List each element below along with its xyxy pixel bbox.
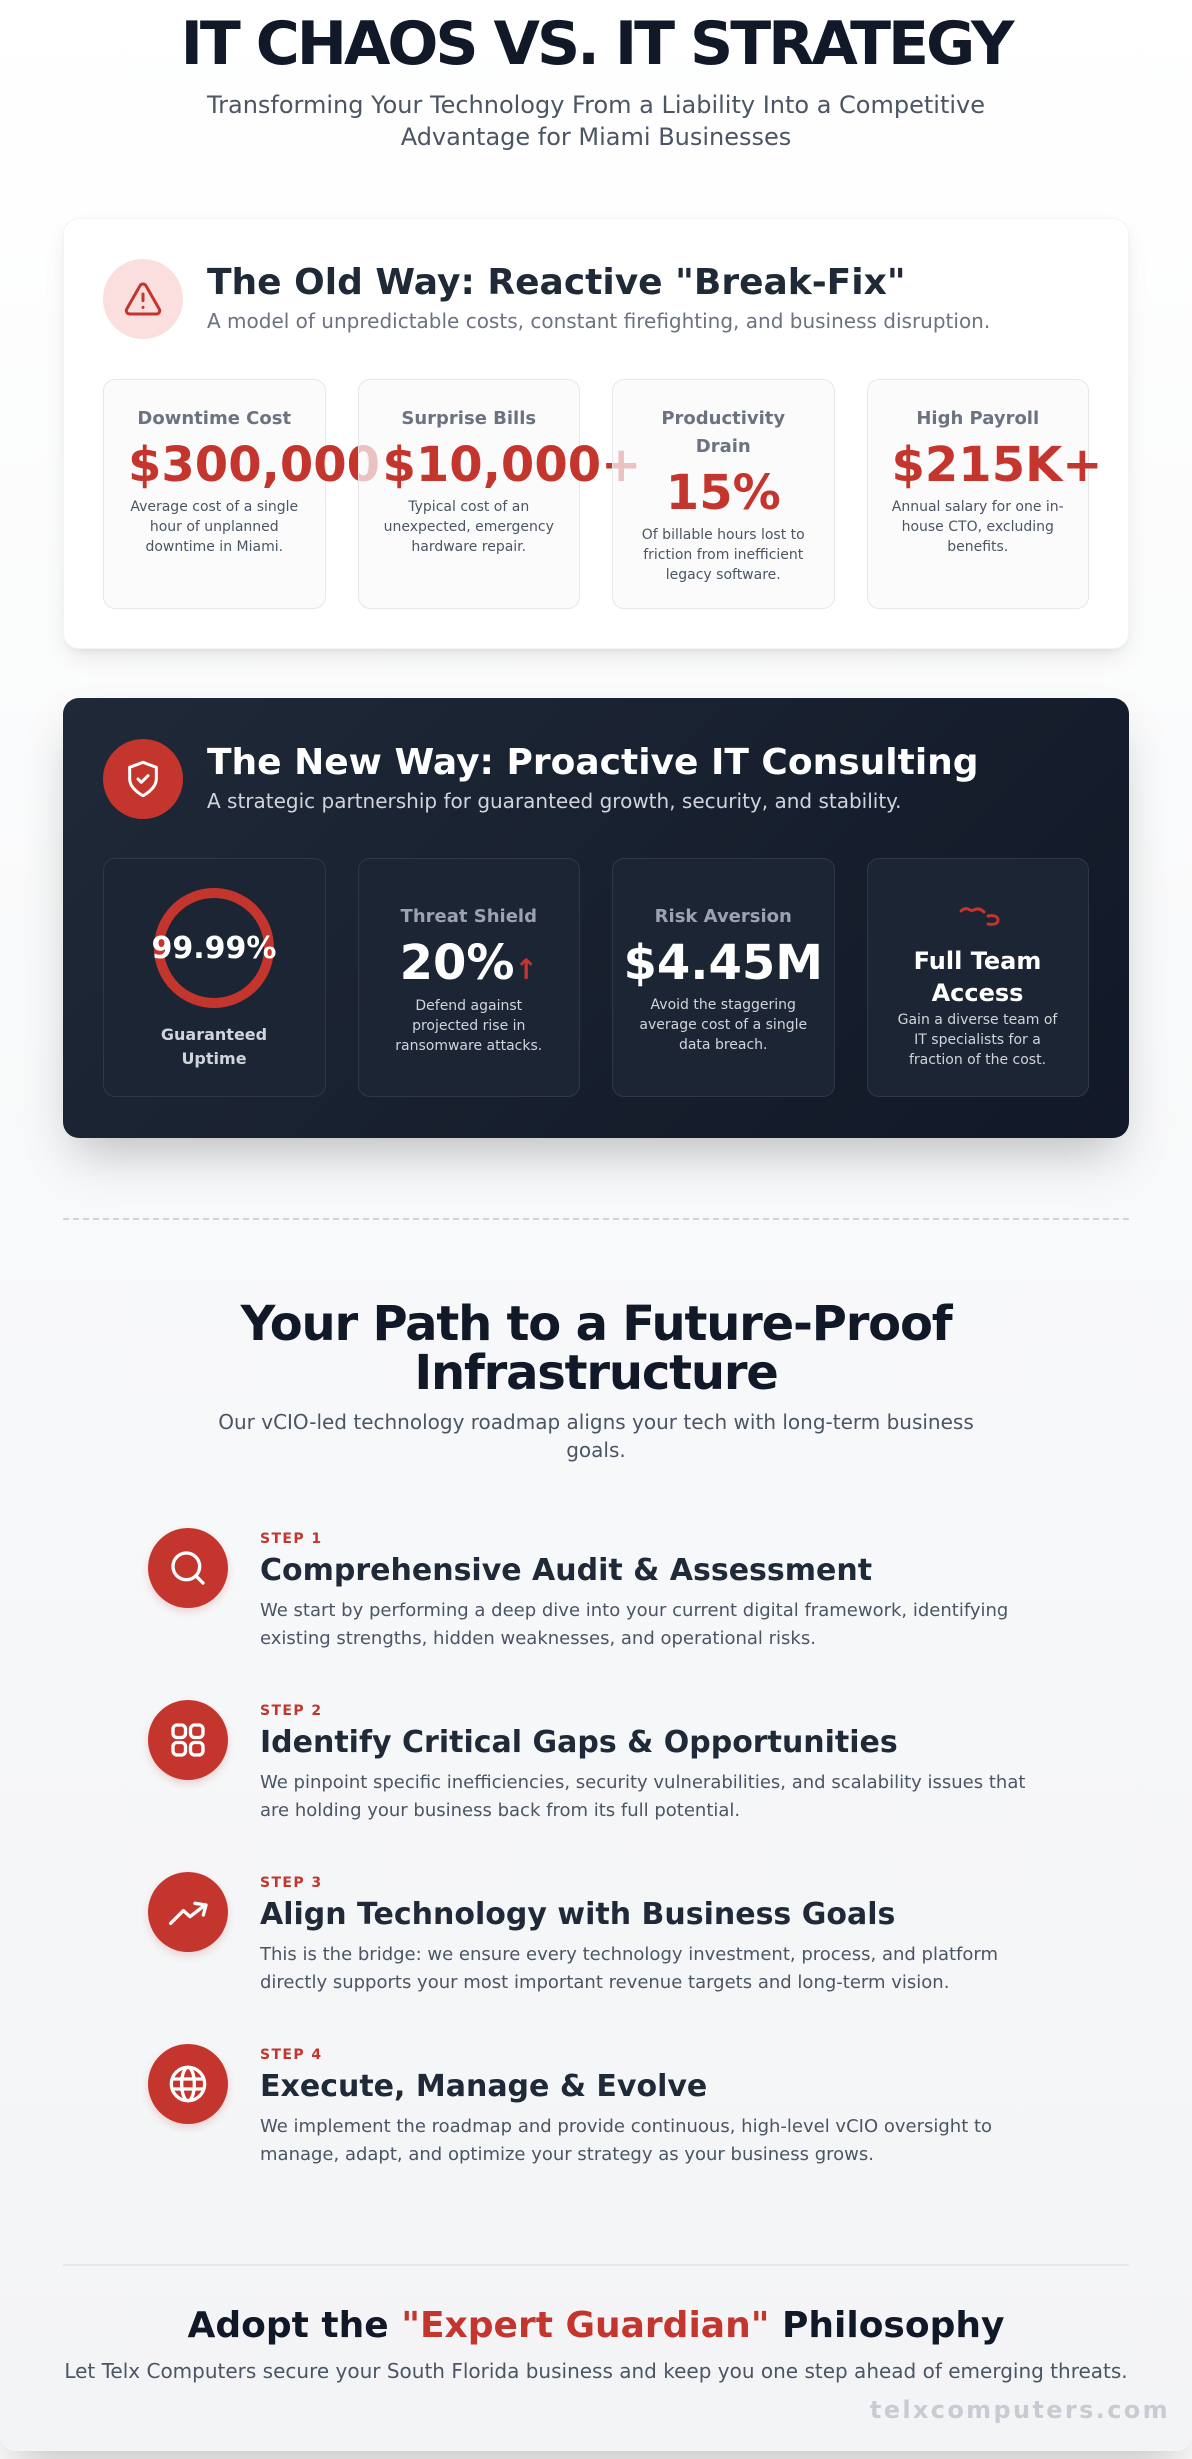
dashed divider xyxy=(63,1218,1129,1220)
panel: old way xyxy=(63,218,1129,649)
step 1 xyxy=(145,1528,1008,1649)
step description: We implement the roadmap and provide continuous, high-level vCIO oversight to manage, adapt, and optimize your strategy as your business grows. xyxy=(260,2116,992,2165)
icon: globe xyxy=(148,2044,228,2124)
stat card: productivity drain: Productivity Drain xyxy=(661,408,785,457)
stat card: threat shield: 20%↑ xyxy=(400,935,538,991)
team description: Gain a diverse team of IT specialists for a fraction of the cost. xyxy=(898,1012,1057,1068)
icon: grid xyxy=(148,1700,228,1780)
stat card: high payroll: Annual salary for one in-house CTO, excluding benefits. xyxy=(892,499,1064,555)
stat card: high payroll: $215K+ xyxy=(892,437,1103,493)
icon: warning triangle xyxy=(103,259,183,339)
step number: STEP 4 xyxy=(260,2047,322,2063)
step 4 xyxy=(145,2044,992,2165)
step number: STEP 3 xyxy=(260,1875,322,1891)
step title: Align Technology with Business Goals xyxy=(260,1897,895,1932)
stat card: downtime cost: $300,000 xyxy=(128,437,380,493)
step number: STEP 1 xyxy=(260,1531,322,1547)
watermark: telxcomputers.com xyxy=(870,2396,1170,2424)
uptime ring xyxy=(154,888,274,1008)
subtitle: Transforming Your Technology From a Liability Into a Competitive xyxy=(207,91,985,119)
stat card: downtime cost: Average cost of a single hour of unplanned downtime in Miami. xyxy=(130,499,298,555)
stat card: surprise bills: $10,000+ xyxy=(382,437,641,493)
stat card: threat shield xyxy=(358,858,580,1097)
heading: old way: The Old Way: Reactive "Break-Fix" xyxy=(207,262,906,303)
stat card: downtime cost xyxy=(103,379,326,609)
stat card: surprise bills: Surprise Bills xyxy=(401,408,536,429)
icon: team (broken glyph) xyxy=(959,907,1000,926)
step 2 xyxy=(145,1700,1025,1821)
icon: trending up xyxy=(148,1872,228,1952)
stat card: surprise bills: Typical cost of an unexpected, emergency hardware repair. xyxy=(384,499,554,555)
step title: Comprehensive Audit & Assessment xyxy=(260,1553,872,1588)
step title: Execute, Manage & Evolve xyxy=(260,2069,707,2104)
step description: We pinpoint specific inefficiencies, security vulnerabilities, and scalability issues that are holding your business back from its full potential. xyxy=(260,1772,1025,1821)
stat card: productivity drain: Of billable hours lost to friction from inefficient legacy software. xyxy=(642,527,805,583)
stat card: high payroll: High Payroll xyxy=(916,408,1039,429)
step number: STEP 2 xyxy=(260,1703,322,1719)
icon: search xyxy=(148,1528,228,1608)
subtitle xyxy=(206,91,985,151)
footer text: Let Telx Computers secure your South Florida business and keep you one step ahead of emerging threats. xyxy=(64,2359,1128,2383)
stat card: risk aversion xyxy=(612,858,834,1097)
section subheading: roadmap: Our vCIO-led technology roadmap aligns your tech with long-term business goals. xyxy=(218,1410,974,1462)
stat card: productivity drain: 15% xyxy=(666,465,781,521)
stat card: surprise bills xyxy=(358,379,580,609)
stat card: high payroll xyxy=(866,379,1089,609)
stat card: guaranteed uptime xyxy=(103,858,326,1097)
stat card: downtime cost: Downtime Cost xyxy=(137,408,291,429)
stat card: productivity drain xyxy=(612,379,834,609)
step description: This is the bridge: we ensure every technology investment, process, and platform directly supports your most important revenue targets and long-term vision. xyxy=(260,1944,998,1993)
step title: Identify Critical Gaps & Opportunities xyxy=(260,1725,898,1760)
step description: We start by performing a deep dive into your current digital framework, identifying existing strengths, hidden weaknesses, and operational risks. xyxy=(260,1600,1008,1649)
section heading: roadmap: Your Path to a Future-Proof Infrastructure xyxy=(241,1296,951,1401)
subheading: new way: A strategic partnership for guaranteed growth, security, and stability. xyxy=(207,789,902,813)
footer heading: Adopt the "Expert Guardian" Philosophy xyxy=(188,2305,1004,2346)
team title: Full Team Access xyxy=(914,947,1041,1007)
icon: shield check xyxy=(103,739,183,819)
stat card: risk aversion: Risk Aversion xyxy=(655,906,792,927)
stat card: risk aversion: Avoid the staggering average cost of a single data breach. xyxy=(639,997,807,1053)
title: IT CHAOS VS. IT STRATEGY xyxy=(181,9,1011,79)
step 3 xyxy=(145,1872,998,1993)
stat card: risk aversion: $4.45M xyxy=(623,935,823,991)
subheading: old way: A model of unpredictable costs, constant firefighting, and business disruption. xyxy=(207,309,990,333)
uptime value: 99.99% xyxy=(152,931,276,966)
heading: new way: The New Way: Proactive IT Consulting xyxy=(207,742,979,783)
panel: new way xyxy=(63,698,1129,1138)
stat card: threat shield: Threat Shield xyxy=(401,906,537,927)
stat card: full team access xyxy=(866,858,1089,1097)
uptime label: Guaranteed Uptime xyxy=(161,1025,267,1068)
stat card: threat shield: Defend against projected rise in ransomware attacks. xyxy=(395,998,542,1054)
subtitle: Advantage for Miami Businesses xyxy=(401,123,791,151)
footer divider xyxy=(63,2264,1129,2266)
